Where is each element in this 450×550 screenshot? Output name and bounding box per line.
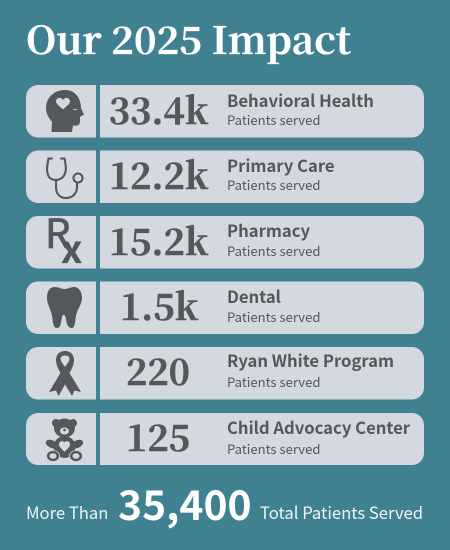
- label: Pharmacy: Pharmacy: [227, 218, 311, 242]
- panel: Dental: [26, 279, 424, 334]
- icon panel background: [26, 216, 96, 268]
- icon: Rx: R: [45, 202, 70, 260]
- stat: 15.2k: 15.2k: [109, 214, 209, 266]
- stat panel background: [100, 150, 424, 203]
- icon panel background: [26, 347, 96, 400]
- panel: Child Advocacy Center: [26, 410, 424, 465]
- label: Behavioral Health: Behavioral Health: [227, 88, 374, 112]
- footer: total 35,400: 35,400: [118, 473, 252, 532]
- label: Patients served: Patients served: [227, 110, 320, 129]
- icon panel background: [26, 150, 96, 203]
- icon: Rx: [45, 202, 82, 274]
- icon: teddy bear: [44, 418, 85, 462]
- stat: 125: 125: [126, 410, 190, 462]
- footer: More Than: More Than: [26, 500, 108, 524]
- stat panel background: [100, 282, 424, 334]
- icon: stethoscope: [47, 158, 82, 198]
- footer summary: [26, 473, 423, 532]
- stat: 12.2k: 12.2k: [109, 148, 209, 200]
- stat: 1.5k: 1.5k: [120, 279, 199, 331]
- stat: 220: 220: [126, 344, 190, 396]
- panel: Behavioral Health: [26, 83, 424, 138]
- label: Patients served: Patients served: [227, 175, 320, 194]
- panel: Primary Care: [26, 148, 424, 203]
- icon: Rx: x: [61, 219, 82, 274]
- label: Ryan White Program: Ryan White Program: [227, 348, 394, 372]
- label: Patients served: Patients served: [227, 439, 320, 458]
- panel: Pharmacy: [26, 202, 424, 274]
- stat panel background: [100, 216, 424, 268]
- label: Patients served: Patients served: [227, 372, 320, 391]
- icon: awareness ribbon: [49, 351, 81, 396]
- label: Patients served: Patients served: [227, 307, 320, 326]
- icon panel background: [26, 85, 96, 138]
- icon: tooth: [47, 287, 82, 328]
- footer: Total Patients Served: Total Patients Served: [260, 500, 423, 524]
- stat: 33.4k: 33.4k: [109, 83, 209, 135]
- stat panel background: [100, 413, 424, 465]
- stat panel background: [100, 347, 424, 400]
- stat panel background: [100, 85, 424, 138]
- label: Child Advocacy Center: Child Advocacy Center: [227, 415, 411, 439]
- label: Primary Care: Primary Care: [227, 153, 335, 177]
- title: Our 2025 Impact: [26, 10, 351, 65]
- label: Dental: Dental: [227, 284, 281, 308]
- icon panel background: [26, 413, 96, 465]
- panel: Ryan White Program: [26, 344, 424, 400]
- icon: head with heart: [46, 90, 84, 132]
- label: Patients served: Patients served: [227, 241, 320, 260]
- icon panel background: [26, 282, 96, 334]
